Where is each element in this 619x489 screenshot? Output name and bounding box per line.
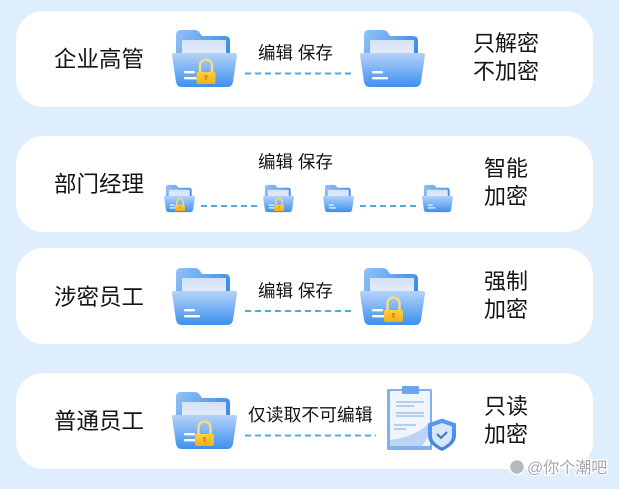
policy label: forced encryption: 加密 <box>484 297 528 322</box>
policy label: decrypt only: 只解密 <box>473 31 539 56</box>
policy label: smart encryption: 加密 <box>484 184 528 209</box>
policy label: read-only encryption: 加密 <box>484 422 528 447</box>
role label: department managers: 部门经理 <box>54 172 144 197</box>
icon: small open folder <box>323 185 354 212</box>
policy label: decrypt only <box>473 31 539 84</box>
action label: edit save: 编辑 保存 <box>258 43 333 63</box>
policy label: forced encryption: 强制 <box>484 269 528 294</box>
policy label: read-only encryption: 只读 <box>484 394 528 419</box>
icon: small locked folder <box>164 185 195 212</box>
panel: classified staff <box>16 248 593 344</box>
arrow: dashed connector <box>245 72 352 74</box>
icon: locked folder <box>172 30 237 87</box>
policy label: forced encryption <box>484 269 528 322</box>
icon: clipboard with shield <box>387 386 456 451</box>
role label: regular staff: 普通员工 <box>54 409 144 434</box>
watermark: @你个潮吧 <box>527 459 607 477</box>
action label: read only: 仅读取不可编辑 <box>248 405 373 425</box>
policy label: decrypt only: 不加密 <box>473 59 539 84</box>
arrow: dashed connector <box>245 434 376 436</box>
icon: open folder <box>360 30 425 87</box>
icon: locked folder <box>172 392 237 449</box>
panel: department managers <box>16 136 593 232</box>
arrow: dashed connector <box>245 310 352 312</box>
icon: small locked folder <box>263 185 294 212</box>
arrow: dashed connector <box>360 205 417 207</box>
panel: senior executives <box>16 11 593 107</box>
role label: classified staff: 涉密员工 <box>54 285 144 310</box>
arrow: dashed connector <box>201 205 258 207</box>
icon: locked folder <box>360 268 425 325</box>
policy label: read-only encryption <box>484 394 528 447</box>
role label: senior executives: 企业高管 <box>54 47 144 72</box>
policy label: smart encryption <box>484 156 528 209</box>
action label: edit save: 编辑 保存 <box>258 281 333 301</box>
icon: open folder <box>172 268 237 325</box>
icon: small open folder <box>422 185 453 212</box>
policy label: smart encryption: 智能 <box>484 156 528 181</box>
action label: edit save: 编辑 保存 <box>258 152 333 172</box>
panel: regular staff <box>16 373 593 469</box>
